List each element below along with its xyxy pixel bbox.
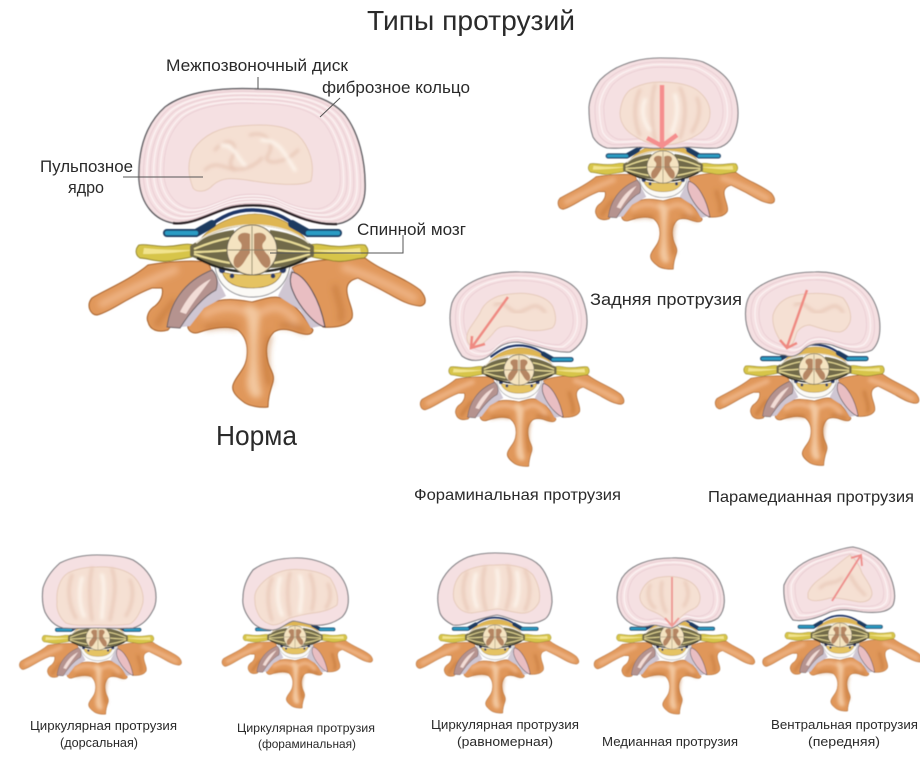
illustration: posterior protrusion bbox=[558, 58, 775, 269]
illustration: circular foraminal bbox=[222, 558, 373, 708]
label: circular uniform protrusion: Циркулярная протрузия bbox=[431, 718, 579, 732]
illustration: median protrusion bbox=[594, 558, 755, 714]
panel: foraminal protrusion bbox=[414, 272, 624, 504]
label: spinal cord: Спинной мозг bbox=[357, 221, 466, 239]
panel: posterior protrusion bbox=[558, 58, 775, 309]
label: circular dorsal protrusion bbox=[30, 719, 177, 750]
label: nucleus pulposus bbox=[40, 158, 133, 197]
label: ventral protrusion bbox=[771, 718, 918, 749]
label: circular uniform protrusion: (равномерная) bbox=[457, 735, 553, 749]
panel: circular foraminal protrusion bbox=[222, 558, 375, 751]
label: paramedian protrusion: Парамедианная протрузия bbox=[708, 489, 914, 506]
illustration: circular dorsal bbox=[19, 555, 181, 714]
label: circular uniform protrusion bbox=[431, 718, 579, 749]
label: intervertebral disc: Межпозвоночный диск bbox=[166, 57, 349, 75]
label: circular foraminal protrusion bbox=[237, 721, 375, 751]
label: annulus fibrosus: фиброзное кольцо bbox=[322, 79, 470, 97]
leader lines bbox=[123, 77, 403, 253]
label: posterior protrusion: Задняя протрузия bbox=[590, 290, 742, 309]
panel: ventral protrusion bbox=[763, 547, 920, 749]
label: nucleus pulposus: Пульпозное bbox=[40, 158, 133, 176]
panel: normal vertebra bbox=[40, 57, 470, 451]
label: nucleus pulposus: ядро bbox=[68, 179, 104, 197]
label: ventral protrusion: Вентральная протрузия bbox=[771, 718, 918, 732]
label: circular dorsal protrusion: Циркулярная протрузия bbox=[30, 719, 177, 733]
title: Типы протрузий bbox=[367, 5, 575, 36]
label: ventral protrusion: (передняя) bbox=[808, 735, 880, 749]
label: circular foraminal protrusion: (фораминальная) bbox=[258, 737, 356, 751]
label: circular dorsal protrusion: (дорсальная) bbox=[60, 736, 138, 750]
label: median protrusion: Медианная протрузия bbox=[602, 735, 738, 749]
heading: norm: Норма bbox=[216, 420, 297, 451]
label: foraminal protrusion: Фораминальная протрузия bbox=[414, 487, 621, 504]
illustration: paramedian protrusion bbox=[715, 272, 919, 465]
panel: circular uniform protrusion bbox=[416, 553, 579, 749]
illustration: circular uniform bbox=[416, 553, 579, 713]
illustration: normal disc and vertebra bbox=[89, 89, 425, 407]
panel: median protrusion bbox=[594, 558, 755, 749]
panel: paramedian protrusion bbox=[708, 272, 919, 506]
illustration: foraminal protrusion bbox=[420, 272, 624, 466]
illustration: ventral protrusion bbox=[763, 547, 920, 711]
panel: circular dorsal protrusion bbox=[19, 555, 181, 750]
label: circular foraminal protrusion: Циркулярная протрузия bbox=[237, 721, 375, 735]
